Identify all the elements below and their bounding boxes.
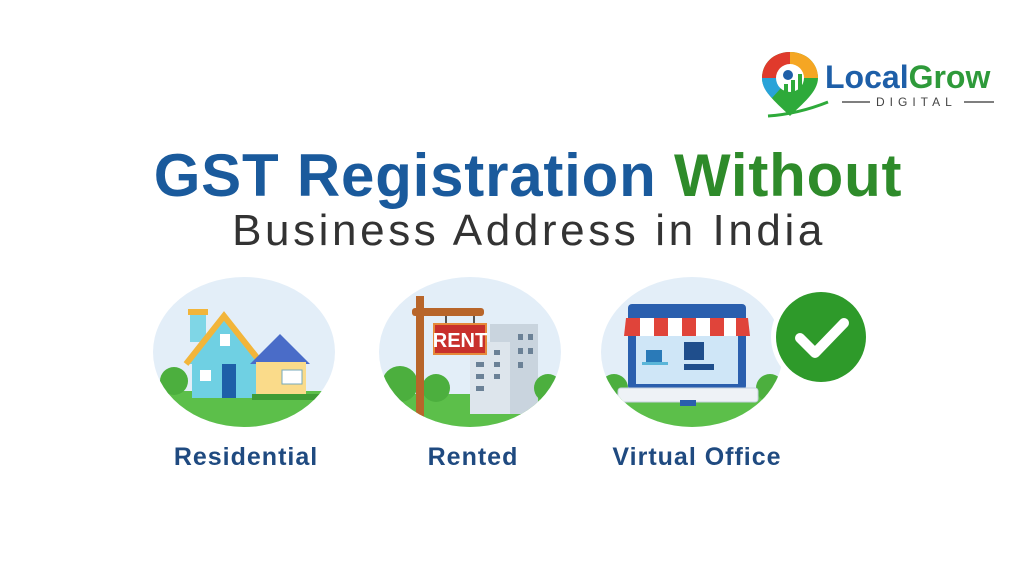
icon: map pin [762,52,828,116]
icon: residential house [153,277,335,427]
label: residential: Residential [174,443,318,471]
subtitle: Business Address in India [232,206,826,255]
icon: rent sign [379,277,561,427]
label: virtual office: Virtual Office [612,443,782,471]
icon: virtual office [601,277,781,427]
logo: DIGITAL [876,95,957,109]
icon: rent sign: RENT [433,330,487,352]
icon: green checkmark [771,292,866,382]
label: rented: Rented [428,443,518,471]
logo [762,52,994,118]
title: GST Registration Without [154,142,902,209]
logo: LocalGrow [825,59,990,95]
